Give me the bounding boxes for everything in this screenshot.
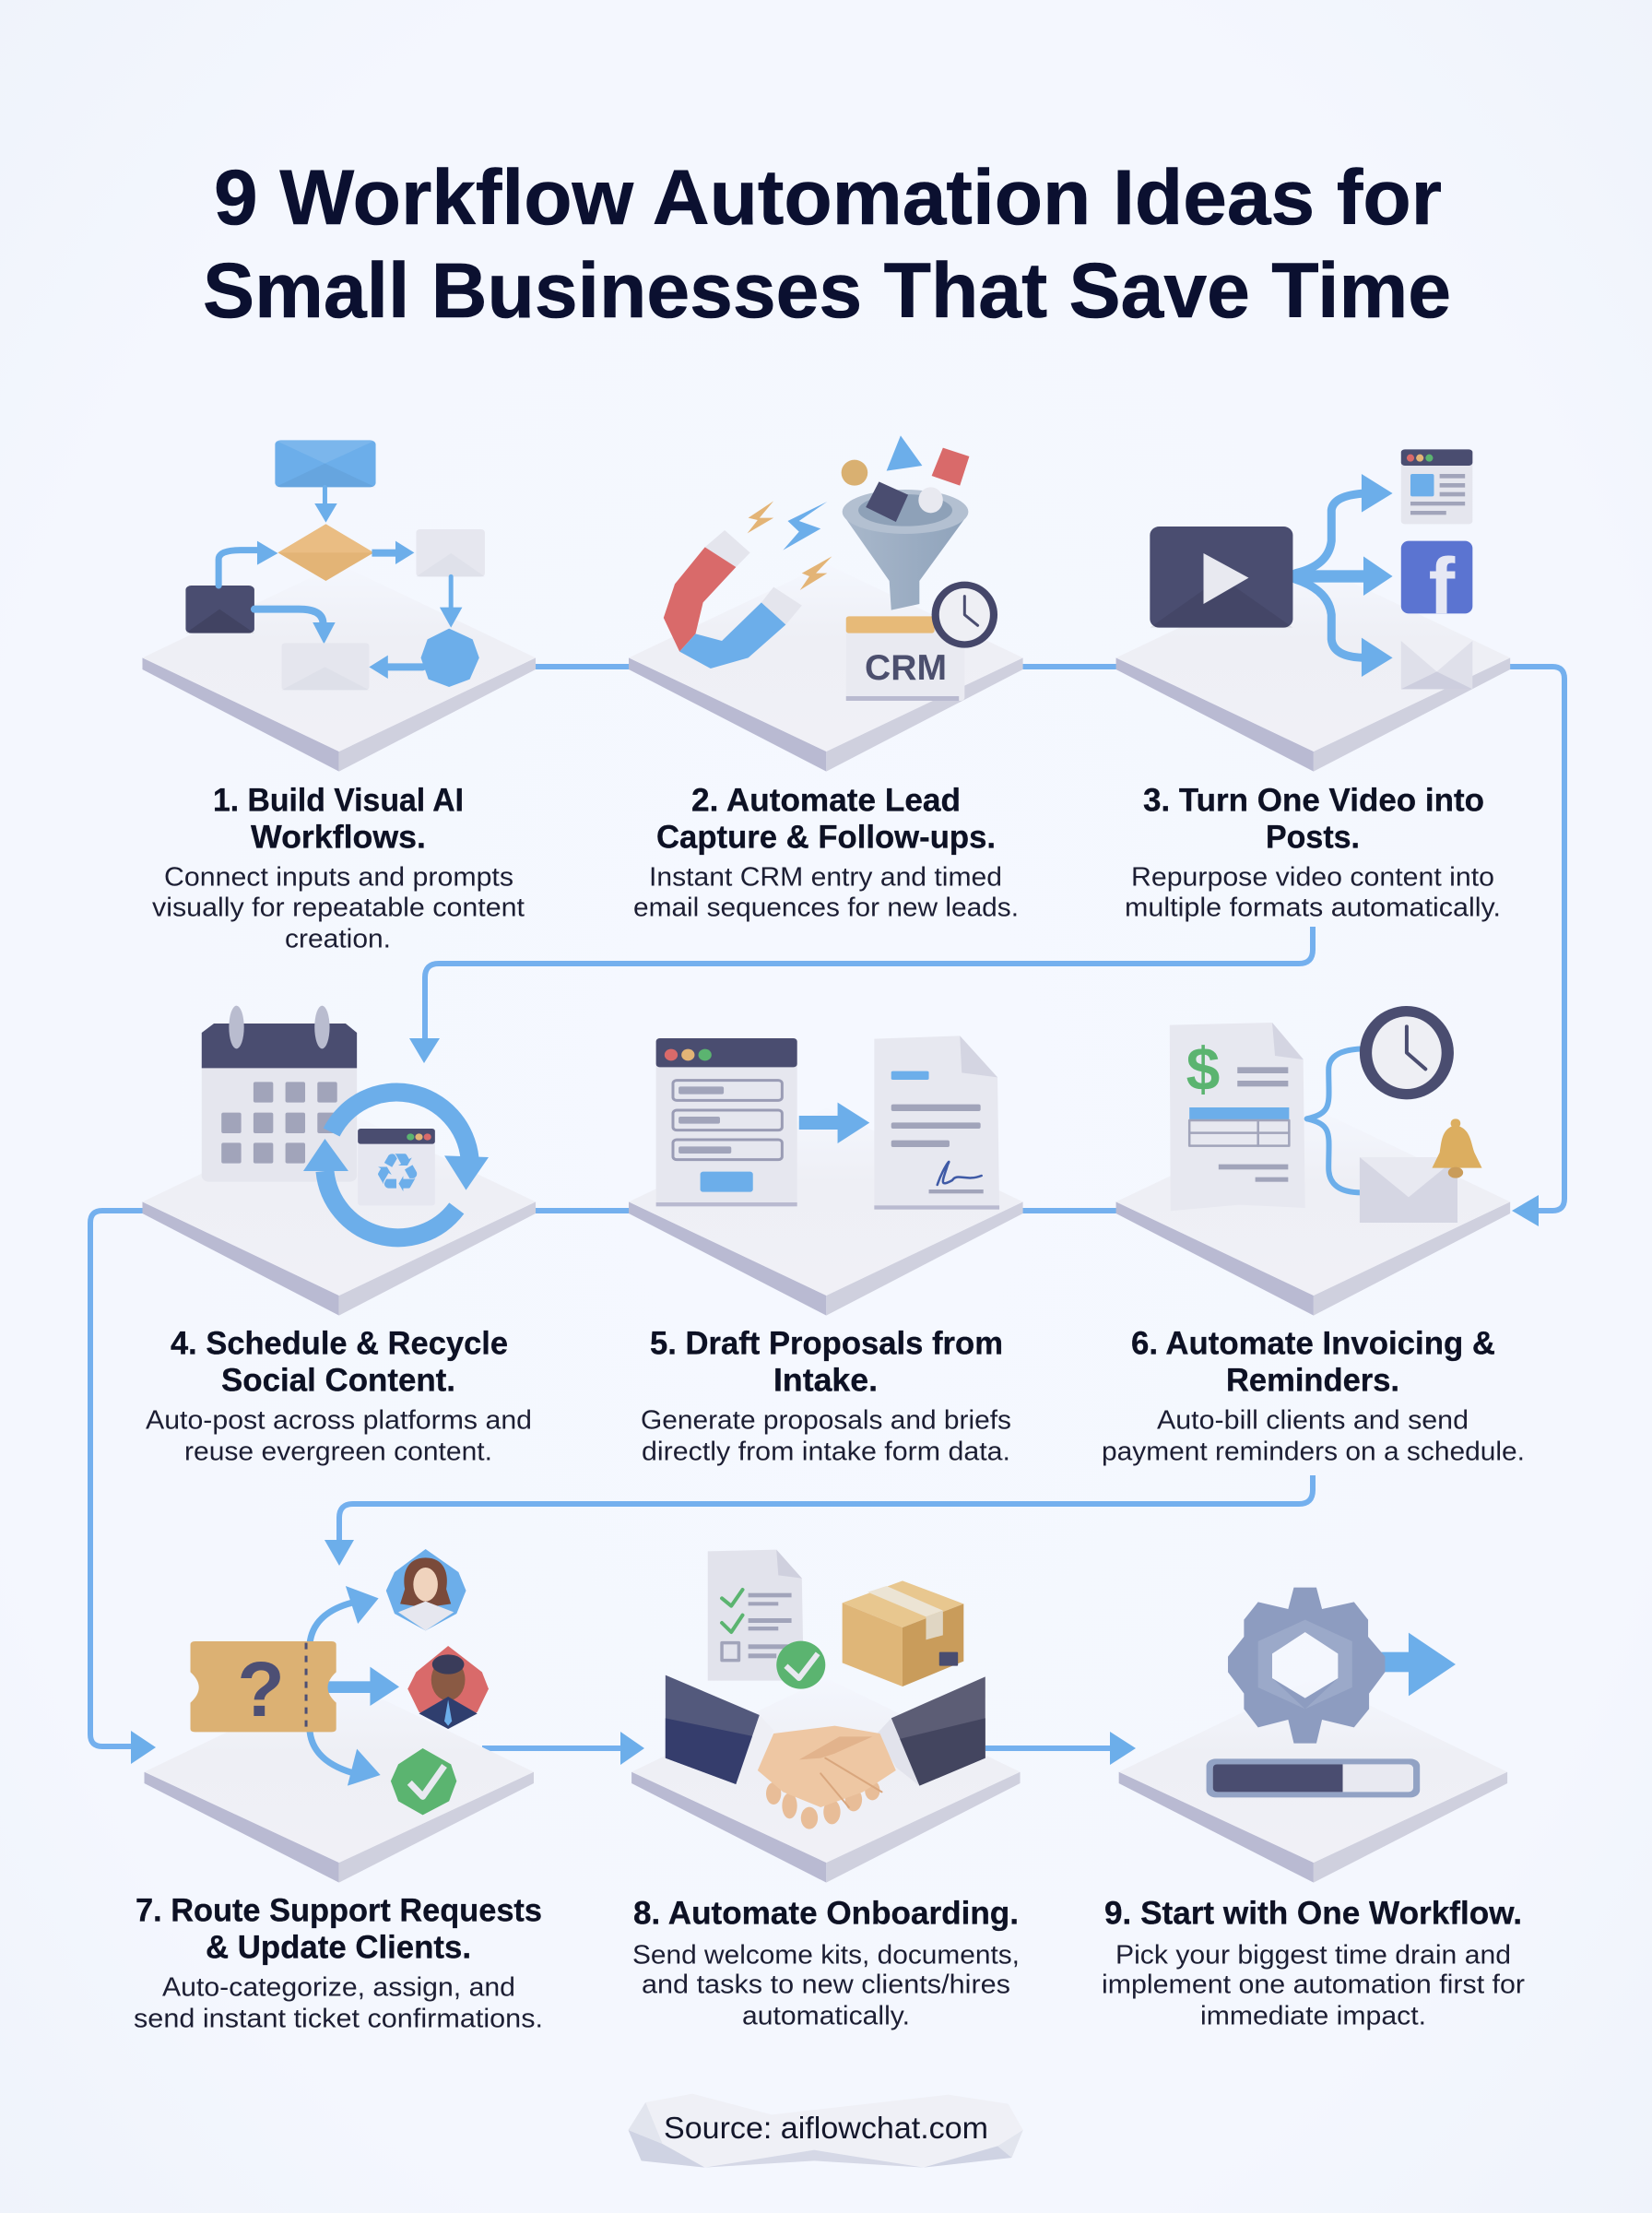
panel: step 8 bbox=[631, 1550, 1021, 2030]
heading 5: Intake. bbox=[773, 1363, 878, 1398]
platform 7 bbox=[145, 1678, 534, 1883]
description 2 bbox=[633, 863, 1019, 922]
panel: step 9 bbox=[1102, 1588, 1525, 2030]
panel: step 6 bbox=[1102, 1006, 1525, 1466]
description 4: reuse evergreen content. bbox=[184, 1437, 492, 1466]
description 8 bbox=[632, 1940, 1020, 2030]
heading 1: Workflows. bbox=[251, 819, 426, 856]
panel: step 4 bbox=[142, 1006, 536, 1466]
description 3 bbox=[1125, 863, 1501, 922]
description 5: Generate proposals and briefs bbox=[641, 1405, 1011, 1435]
platform 4 bbox=[142, 1108, 536, 1316]
icon: video branching to posts: f bbox=[1429, 542, 1456, 631]
heading 7 bbox=[136, 1892, 542, 1966]
icon: checklist, parcel and handshake bbox=[666, 1550, 985, 1829]
description 5: directly from intake form data. bbox=[642, 1437, 1010, 1466]
heading 2 bbox=[656, 782, 996, 856]
description 1: Connect inputs and prompts bbox=[164, 863, 513, 893]
heading 9: 9. Start with One Workflow. bbox=[1104, 1896, 1522, 1931]
description 9: immediate impact. bbox=[1200, 2001, 1426, 2030]
description 9: Pick your biggest time drain and bbox=[1115, 1940, 1511, 1970]
description 1 bbox=[152, 863, 525, 953]
heading 7: & Update Clients. bbox=[206, 1929, 471, 1966]
description 7: Auto-categorize, assign, and bbox=[162, 1973, 515, 2003]
heading 4 bbox=[171, 1326, 508, 1398]
connector: row 1 links and drop to step 6 bbox=[530, 667, 1564, 1226]
heading 1: 1. Build Visual AI bbox=[213, 782, 464, 819]
heading 3 bbox=[1143, 782, 1484, 856]
heading 6: 6. Automate Invoicing & bbox=[1131, 1326, 1495, 1361]
description 5 bbox=[641, 1405, 1011, 1466]
heading 4: 4. Schedule & Recycle bbox=[171, 1326, 508, 1361]
heading 5: 5. Draft Proposals from bbox=[650, 1326, 1003, 1361]
connector: step 3 to step 4 bbox=[409, 927, 1313, 1063]
description 4 bbox=[146, 1405, 532, 1466]
icon: calendar with recycle loop bbox=[202, 1006, 489, 1237]
source badge: Source: aiflowchat.com bbox=[664, 2111, 988, 2145]
connector: row 2 links and drop to step 7 bbox=[90, 1211, 1120, 1764]
description 4: Auto-post across platforms and bbox=[146, 1405, 532, 1435]
icon: flowchart bbox=[185, 440, 485, 690]
panel: step 2 bbox=[629, 435, 1023, 922]
heading 4: Social Content. bbox=[221, 1363, 455, 1398]
description 2: email sequences for new leads. bbox=[633, 893, 1019, 922]
heading 6: Reminders. bbox=[1226, 1363, 1399, 1398]
connector: step 7 to step 8 bbox=[482, 1732, 644, 1765]
description 8: automatically. bbox=[742, 2001, 910, 2030]
description 1: visually for repeatable content bbox=[152, 893, 525, 922]
icon: support ticket routed to agents bbox=[191, 1549, 489, 1815]
title: 9 Workflow Automation Ideas for bbox=[214, 154, 1442, 241]
description 8: Send welcome kits, documents, bbox=[632, 1940, 1020, 1970]
heading 1 bbox=[213, 782, 464, 856]
icon: invoice, clock and reminder bbox=[1170, 1006, 1482, 1223]
description 7: send instant ticket confirmations. bbox=[134, 2005, 543, 2034]
heading 8: 8. Automate Onboarding. bbox=[633, 1896, 1019, 1931]
source badge bbox=[629, 2094, 1023, 2168]
icon: gear, arrow and progress bar bbox=[1207, 1588, 1456, 1797]
panel: step 3 bbox=[1116, 449, 1510, 922]
platform 1 bbox=[142, 564, 536, 772]
panel: step 1 bbox=[142, 440, 536, 953]
platform 9 bbox=[1119, 1678, 1507, 1883]
platform 3 bbox=[1116, 564, 1510, 772]
heading 6 bbox=[1131, 1326, 1495, 1398]
description 6: Auto-bill clients and send bbox=[1157, 1405, 1469, 1435]
icon: invoice, clock and reminder: $ bbox=[1186, 1035, 1220, 1103]
heading 3: 3. Turn One Video into bbox=[1143, 782, 1484, 819]
heading 3: Posts. bbox=[1266, 819, 1360, 856]
icon: support ticket routed to agents: ? bbox=[237, 1646, 285, 1733]
description 3: multiple formats automatically. bbox=[1125, 893, 1501, 922]
icon: calendar with recycle loop: ♻ bbox=[373, 1142, 421, 1204]
heading 5 bbox=[650, 1326, 1003, 1398]
icon: magnet, funnel, CRM and clock: CRM bbox=[865, 648, 947, 688]
description 7 bbox=[134, 1973, 543, 2034]
icon: intake form to proposal document bbox=[656, 1035, 999, 1210]
connector: step 6 to step 7 bbox=[324, 1475, 1313, 1566]
description 3: Repurpose video content into bbox=[1131, 863, 1494, 893]
description 1: creation. bbox=[285, 924, 391, 953]
icon: video branching to posts bbox=[1150, 449, 1472, 689]
description 8: and tasks to new clients/hires bbox=[642, 1970, 1010, 1999]
description 2: Instant CRM entry and timed bbox=[649, 863, 1002, 893]
panel: step 7 bbox=[134, 1549, 543, 2034]
description 6 bbox=[1102, 1405, 1525, 1466]
platform 8 bbox=[631, 1678, 1021, 1883]
heading 2: 2. Automate Lead bbox=[691, 782, 961, 819]
description 9 bbox=[1102, 1940, 1525, 2030]
description 6: payment reminders on a schedule. bbox=[1102, 1437, 1525, 1466]
heading 7: 7. Route Support Requests bbox=[136, 1892, 542, 1929]
title bbox=[203, 154, 1451, 334]
title: Small Businesses That Save Time bbox=[203, 247, 1451, 334]
panel: step 5 bbox=[629, 1035, 1023, 1466]
platform 5 bbox=[629, 1108, 1023, 1316]
icon: magnet, funnel, CRM and clock bbox=[664, 435, 997, 701]
description 9: implement one automation first for bbox=[1102, 1970, 1525, 1999]
heading 2: Capture & Follow-ups. bbox=[656, 819, 996, 856]
platform 2 bbox=[629, 564, 1023, 772]
platform 6 bbox=[1116, 1108, 1510, 1316]
connector: step 8 to step 9 bbox=[985, 1732, 1136, 1765]
